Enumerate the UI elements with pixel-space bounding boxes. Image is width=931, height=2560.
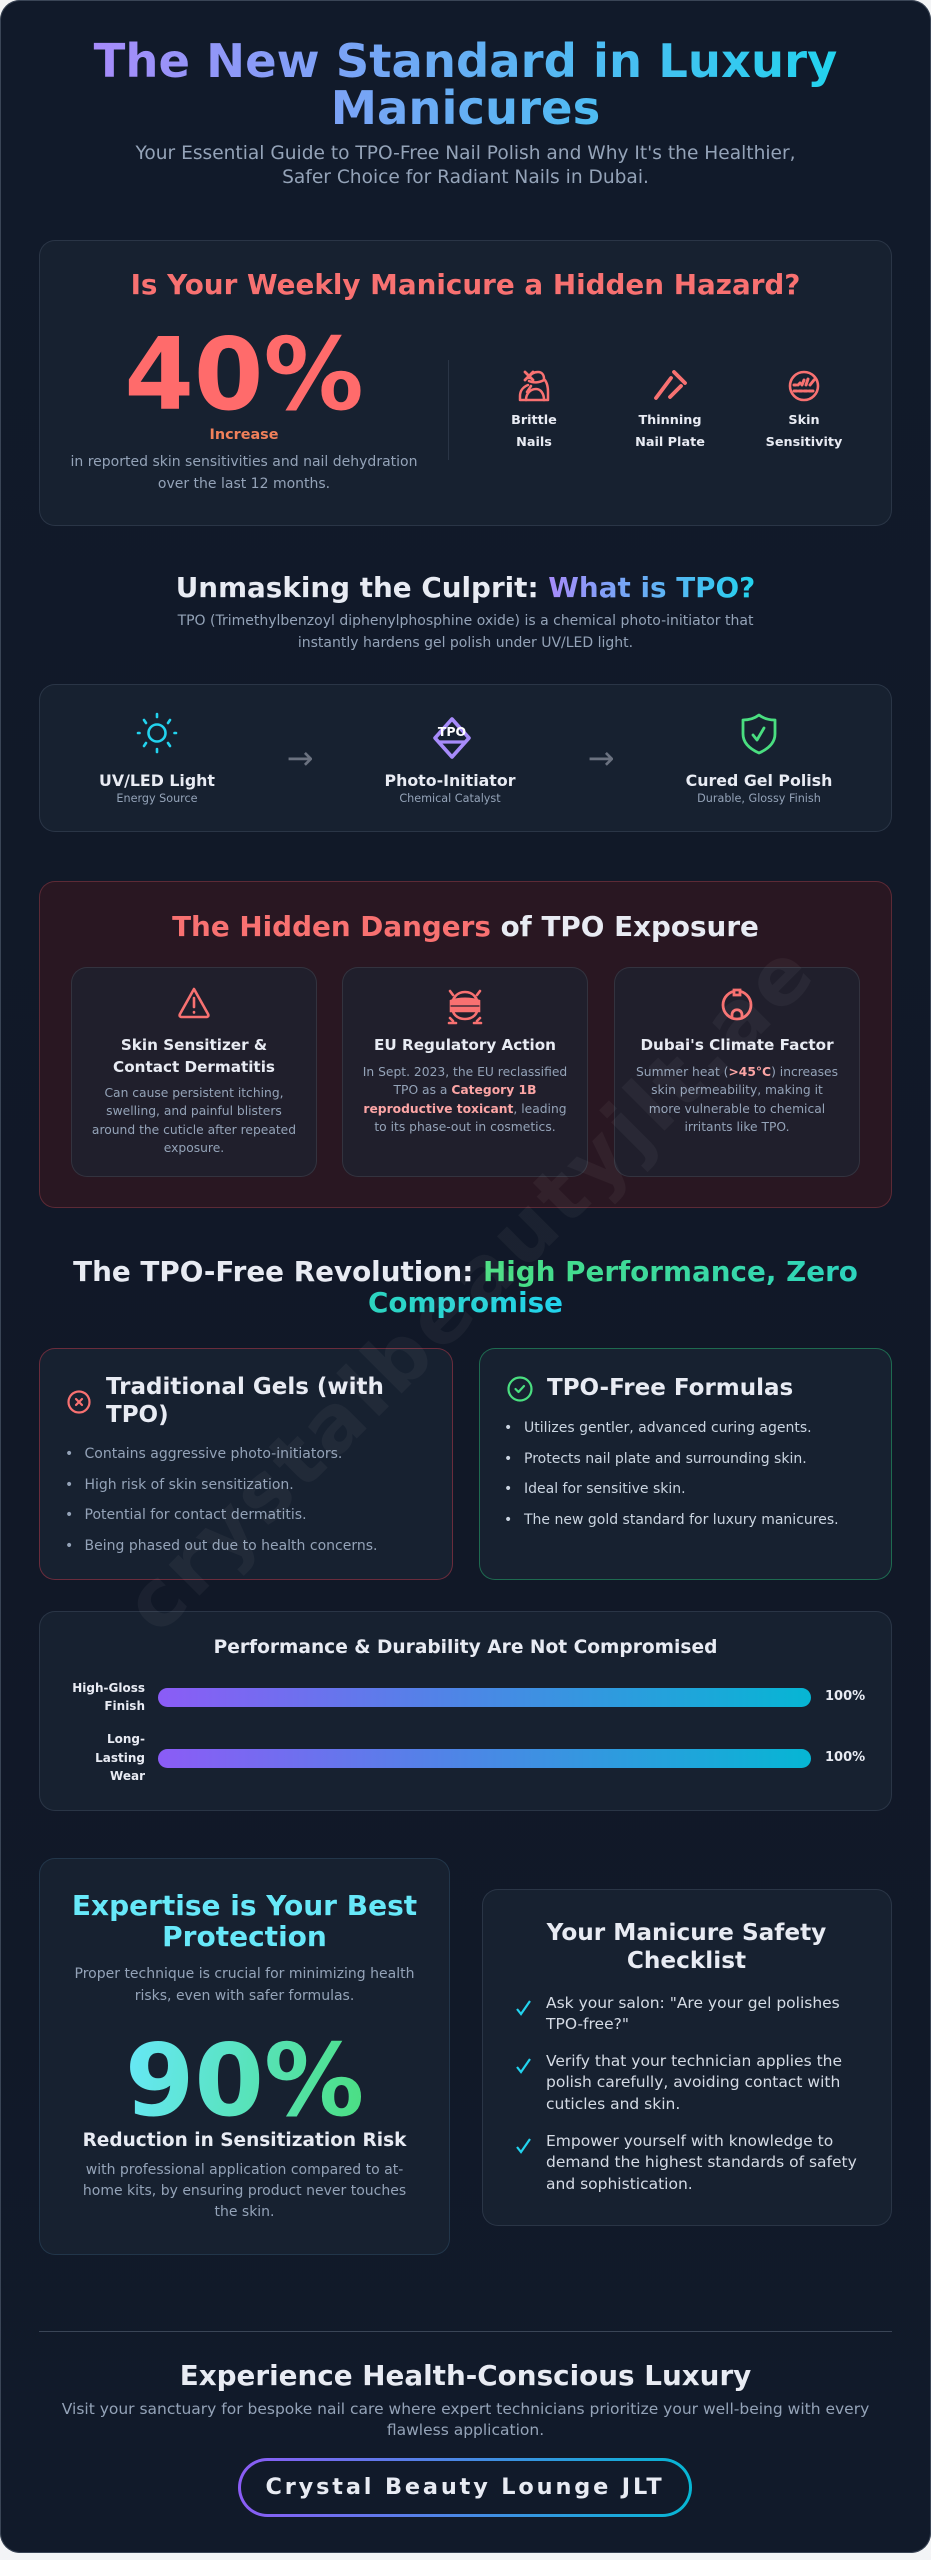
- checklist heading: Your Manicure Safety: [547, 1919, 826, 1946]
- panel: TPO-free formulas: [479, 1348, 892, 1580]
- icon: skin sensitivity: [788, 370, 820, 402]
- bullet list: [65, 1446, 377, 1554]
- footer description: Visit your sanctuary for bespoke nail care where expert technicians prioritize your well-being with every: [62, 2400, 869, 2418]
- bullet list: •: [65, 1507, 73, 1523]
- brand button: [238, 2458, 692, 2517]
- label: thinning nail plate: Thinning: [638, 413, 702, 428]
- section heading: TPO-free revolution: The TPO-Free Revolution: High Performance, Zero: [73, 1255, 858, 1288]
- label: brittle nails: Nails: [516, 434, 552, 450]
- bar label: Finish: [104, 1699, 145, 1713]
- section description: what is TPO: TPO (Trimethylbenzoyl diphenylphosphine oxide) is a chemical photo-initiator that: [178, 613, 753, 629]
- label: thinning nail plate: Nail Plate: [635, 434, 705, 450]
- bullet list: •: [504, 1450, 512, 1466]
- bar: 100 percent: [158, 1749, 810, 1768]
- card body: swelling, and painful blisters: [106, 1104, 282, 1118]
- checklist heading: Checklist: [627, 1946, 746, 1974]
- stat description: the skin.: [214, 2204, 275, 2220]
- card body: reproductive toxicant, leading: [363, 1102, 567, 1116]
- brand button inner: [241, 2461, 689, 2514]
- card body: skin permeability, making it: [651, 1083, 823, 1097]
- icon: thinning nail plate: [654, 370, 687, 400]
- section description: what is TPO: instantly hardens gel polish under UV/LED light.: [298, 634, 633, 650]
- checklist heading: [482, 1919, 892, 1974]
- expertise heading: Protection: [162, 1920, 327, 1953]
- sublabel: energy source: Energy Source: [116, 792, 198, 805]
- panel: performance chart: [39, 1611, 892, 1811]
- title: Manicures: [331, 81, 600, 135]
- card heading: TPO-Free Formulas: [547, 1375, 793, 1401]
- card title: Skin Sensitizer &: [121, 1036, 267, 1054]
- section description: what is TPO: [178, 613, 754, 650]
- card heading: [106, 1374, 384, 1428]
- watermark: crystalbeautyjlt.ae: [106, 923, 834, 1651]
- stat: 40 percent: 40%: [124, 316, 364, 433]
- step: cured gel polish: [686, 714, 832, 805]
- symptom: skin sensitivity: [766, 370, 842, 450]
- panel: TPO-free formulas: The new gold standard for luxury manicures.: [524, 1512, 839, 1528]
- card body: to its phase-out in cosmetics.: [374, 1120, 556, 1134]
- stat description: with professional application compared to at-: [86, 2162, 403, 2178]
- icon: warning: [178, 988, 210, 1018]
- item text: and sophistication.: [546, 2175, 693, 2193]
- label: brittle nails: Brittle: [511, 413, 557, 428]
- label: skin sensitivity: Skin: [788, 413, 820, 428]
- sublabel: durable finish: Durable, Glossy Finish: [697, 792, 821, 805]
- section heading: what is TPO: Unmasking the Culprit: What is TPO?: [176, 571, 755, 604]
- card body: In Sept. 2023, the EU reclassified: [363, 1065, 567, 1079]
- symptom: brittle nails: [511, 370, 557, 450]
- panel: TPO-free formulas: Utilizes gentler, advanced curing agents.: [524, 1420, 812, 1436]
- card body: more vulnerable to chemical: [649, 1102, 825, 1116]
- checklist item 2: [512, 2051, 882, 2117]
- icon: shield check: [742, 714, 776, 754]
- item text: [546, 2131, 857, 2195]
- card body: Summer heat (>45°C) increases: [636, 1065, 838, 1079]
- footer heading: Experience Health-Conscious Luxury: [180, 2359, 751, 2392]
- bar value: 100%: [825, 1689, 865, 1704]
- title: [40, 38, 891, 132]
- panel: expertise: [39, 1858, 450, 2255]
- item text: TPO-free?": [546, 2015, 629, 2033]
- label: brittle nails: [511, 413, 557, 450]
- card body: [92, 1086, 296, 1155]
- danger card: skin sensitizer: [71, 967, 317, 1177]
- label: cured gel polish: Cured Gel Polish: [686, 771, 832, 790]
- icon: TPO diamond: TPO: [438, 724, 466, 739]
- item text: Verify that your technician applies the: [546, 2052, 842, 2070]
- stat description: home kits, by ensuring product never touches: [83, 2183, 406, 2199]
- step: UV/LED light: [99, 712, 215, 805]
- icon: climate: [722, 988, 752, 1020]
- title: The New Standard in Luxury: [94, 34, 837, 88]
- danger card: Dubai climate: [614, 967, 860, 1177]
- panel: hidden dangers: [39, 881, 892, 1208]
- label: skin sensitivity: [766, 413, 842, 450]
- panel: traditional gels: Being phased out due to health concerns.: [84, 1538, 377, 1554]
- expertise heading: Expertise is Your Best: [72, 1889, 417, 1922]
- expertise intro: risks, even with safer formulas.: [135, 1988, 354, 2004]
- card title: Contact Dermatitis: [113, 1058, 275, 1076]
- icon: check: [516, 2138, 532, 2154]
- card heading: TPO): [106, 1402, 169, 1428]
- label: photo-initiator: Photo-Initiator: [384, 771, 516, 790]
- expertise intro: Proper technique is crucial for minimizing health: [75, 1966, 414, 1982]
- bar label: High-Gloss: [72, 1681, 145, 1695]
- card body: Can cause persistent itching,: [104, 1086, 284, 1100]
- item text: cuticles and skin.: [546, 2095, 680, 2113]
- footer description: flawless application.: [387, 2421, 544, 2439]
- bar label: Lasting: [95, 1751, 145, 1765]
- bar label: Wear: [110, 1769, 145, 1783]
- icon: brittle nails: [518, 370, 550, 402]
- section heading: TPO-free revolution: Compromise: [368, 1286, 563, 1319]
- label: thinning nail plate: [635, 413, 705, 450]
- panel: TPO-free formulas: Protects nail plate and surrounding skin.: [524, 1450, 807, 1466]
- icon: EU regulatory: [448, 990, 482, 1024]
- arrow: →: [588, 739, 614, 777]
- bullet list: •: [65, 1476, 73, 1492]
- checklist item 3: [512, 2131, 882, 2197]
- item text: [546, 1993, 840, 2036]
- subtitle: [135, 143, 796, 188]
- stat label: increase: Increase: [209, 427, 279, 443]
- bullet list: •: [504, 1420, 512, 1436]
- panel: traditional gels: Potential for contact dermatitis.: [84, 1507, 307, 1523]
- stat label: Reduction in Sensitization Risk: [83, 2130, 406, 2151]
- panel: traditional gels: [39, 1348, 453, 1580]
- card body: [636, 1065, 838, 1134]
- icon: check: [516, 2000, 532, 2016]
- hazard heading: Is Your Weekly Manicure a Hidden Hazard?: [131, 268, 800, 301]
- stat description: over the last 12 months.: [158, 476, 330, 492]
- card heading: Traditional Gels (with: [106, 1374, 384, 1400]
- card body: around the cuticle after repeated: [92, 1123, 296, 1137]
- chart heading: Performance & Durability Are Not Compromised: [214, 1637, 717, 1658]
- label: UV/LED light: UV/LED Light: [99, 771, 215, 790]
- item text: demand the highest standards of safety: [546, 2153, 857, 2171]
- subtitle: Safer Choice for Radiant Nails in Dubai.: [282, 167, 649, 188]
- card title: EU Regulatory Action: [374, 1036, 556, 1054]
- stat description: [71, 454, 417, 492]
- checklist item 1: [512, 1993, 882, 2037]
- item text: [546, 2051, 842, 2115]
- stat description: [39, 2160, 450, 2224]
- item text: Empower yourself with knowledge to: [546, 2132, 833, 2150]
- panel: TPO-free formulas: Ideal for sensitive skin.: [524, 1481, 686, 1497]
- dangers heading: The Hidden Dangers of TPO Exposure: [172, 910, 759, 943]
- bullet list: •: [65, 1538, 73, 1554]
- subtitle: Your Essential Guide to TPO-Free Nail Polish and Why It's the Healthier,: [135, 143, 796, 164]
- bullet list: •: [504, 1512, 512, 1528]
- sublabel: chemical catalyst: Chemical Catalyst: [399, 792, 501, 805]
- item text: polish carefully, avoiding contact with: [546, 2073, 840, 2091]
- icon: TPO diamond: [433, 717, 471, 759]
- card body: [363, 1065, 567, 1134]
- item text: Ask your salon: "Are your gel polishes: [546, 1994, 840, 2012]
- card title: [113, 1036, 275, 1076]
- bullet list: [504, 1420, 839, 1528]
- bar label: [95, 1732, 145, 1783]
- footer description: [0, 2399, 931, 2440]
- icon: check: [516, 2058, 532, 2074]
- card body: TPO as a Category 1B: [394, 1083, 536, 1097]
- symptom: thinning nail plate: [635, 370, 705, 450]
- icon: check circle: [507, 1376, 533, 1402]
- step: photo-initiator: [384, 717, 516, 805]
- card title: Dubai's Climate Factor: [640, 1036, 834, 1054]
- panel: curing process: [39, 684, 892, 832]
- panel: safety checklist: [482, 1889, 892, 2226]
- panel: traditional gels: High risk of skin sensitization.: [84, 1476, 294, 1492]
- bar value: 100%: [825, 1750, 865, 1765]
- expertise intro: [75, 1966, 414, 2004]
- section heading: TPO-free revolution: [73, 1255, 858, 1319]
- label: skin sensitivity: Sensitivity: [766, 434, 842, 450]
- expertise heading: [72, 1889, 417, 1953]
- brand button inner: Crystal Beauty Lounge JLT: [265, 2474, 665, 2500]
- panel: traditional gels: Contains aggressive photo-initiators.: [84, 1446, 342, 1462]
- card body: irritants like TPO.: [684, 1120, 790, 1134]
- card body: exposure.: [164, 1141, 224, 1155]
- bar label: Long-: [107, 1732, 145, 1746]
- bar row: long-lasting wear: [95, 1732, 865, 1783]
- bar: 100 percent: [158, 1688, 810, 1707]
- danger card: EU regulation: [342, 967, 588, 1177]
- stat description: in reported skin sensitivities and nail dehydration: [71, 454, 417, 470]
- stat: 90 percent: 90%: [125, 2022, 364, 2139]
- arrow: →: [287, 739, 313, 777]
- panel: hidden hazard: [39, 240, 892, 526]
- icon: x circle: [67, 1390, 91, 1414]
- bullet list: •: [65, 1446, 73, 1462]
- icon: sun: [136, 712, 178, 754]
- bar label: [72, 1681, 145, 1713]
- bar row: high-gloss finish: [72, 1681, 865, 1713]
- bullet list: •: [504, 1481, 512, 1497]
